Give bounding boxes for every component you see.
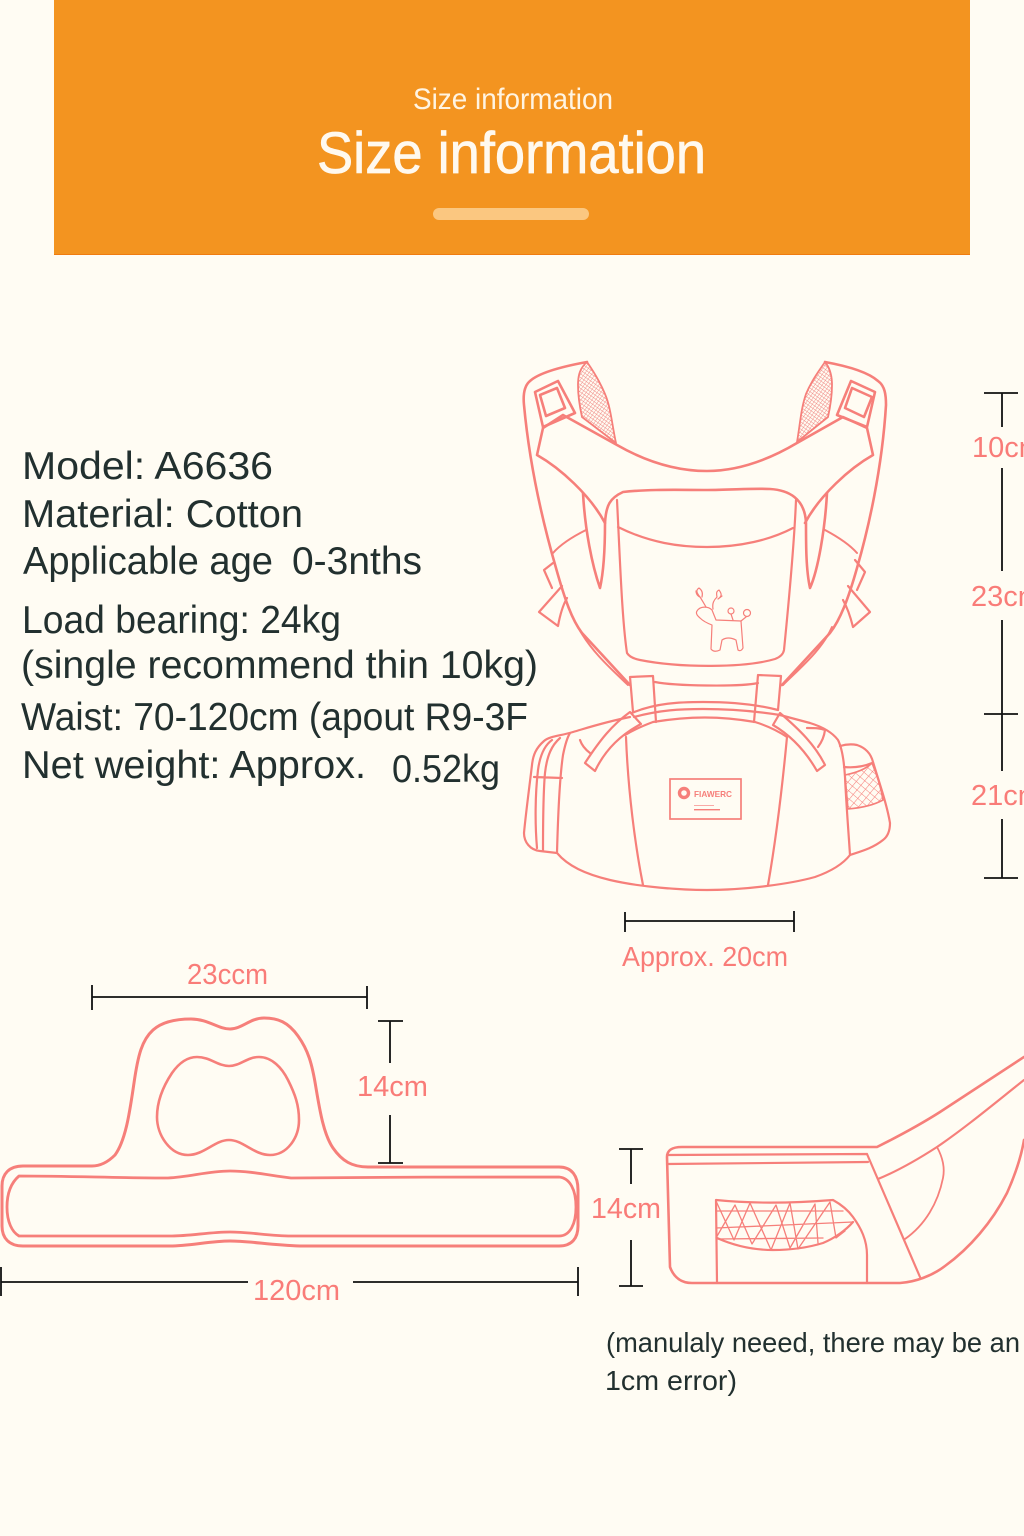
product specification text: Applicable age [23,540,273,583]
header banner [54,0,970,255]
hip seat body [524,715,850,890]
belt outer outline [2,1018,578,1246]
product specification text: (single recommend thin 10kg) [21,644,538,687]
banner title: Size information [317,121,706,186]
product specification text: Load bearing: 24kg [22,599,341,642]
dimension: 120cm belt length [1,1267,578,1307]
carrier connecting straps [630,675,781,722]
carrier shoulder mesh panels [578,362,832,443]
waist belt flat drawing [2,1018,578,1246]
deer emblem [696,588,750,651]
hip seat left arm [585,712,641,771]
carrier outer shoulder outline [524,362,886,685]
carrier chest panel [583,489,827,588]
belt inner outline [7,1171,576,1236]
measurement note [605,1327,1020,1396]
side view mesh [716,1201,853,1250]
dimension: approx 20cm width: Approx. 20cm [622,941,788,972]
hip seat waist band [625,702,787,737]
carrier left tabs [539,563,567,626]
hip seat right arm [773,713,825,771]
product specification text: 0.52kg [392,748,500,791]
dimension: approx 20cm width [622,911,794,972]
baby carrier front view [524,362,890,890]
hip seat side view [667,1057,1024,1283]
side view curved seam [905,1147,944,1239]
dimension: vertical carrier heights [971,393,1024,878]
banner subtitle: Size information [413,83,613,116]
dimension: 120cm belt length: 120cm [253,1275,340,1307]
right strap buckle [837,381,875,427]
banner accent bar [433,208,589,220]
dimension: 23ccm width [92,959,367,1010]
product specification text: Net weight: Approx. [22,744,366,787]
product specification text: Model: A6636 [22,445,273,488]
side view outer outline [667,1057,1024,1283]
measurement note: 1cm error) [605,1365,737,1396]
product specification text: Waist: 70-120cm (apout R9-3F [21,696,528,739]
measurement note: (manulaly neeed, there may be an [606,1327,1020,1358]
side view top seams [667,1080,1024,1277]
carrier pocket [617,500,796,666]
brand label [670,779,741,819]
dimension: 14cm hip seat height [591,1149,661,1286]
carrier right tabs [843,560,870,627]
left strap buckle [535,381,575,427]
product specification text: Material: Cotton [22,493,303,536]
dimension: 14cm belt height: 14cm [357,1071,428,1103]
carrier side wings [553,530,857,685]
side view pocket [716,1200,867,1283]
dimension: 14cm hip seat height: 14cm [591,1193,661,1225]
product specification text: 0-3nths [292,540,422,583]
belt inner hole [157,1057,299,1155]
dimension: 14cm belt height [357,1021,428,1163]
dimension: 23ccm width: 23ccm [187,959,268,991]
product specification text [21,445,538,791]
carrier yoke [537,415,873,523]
hip seat side bottle pocket [840,744,890,855]
brand label: FIAWERC [694,789,732,799]
